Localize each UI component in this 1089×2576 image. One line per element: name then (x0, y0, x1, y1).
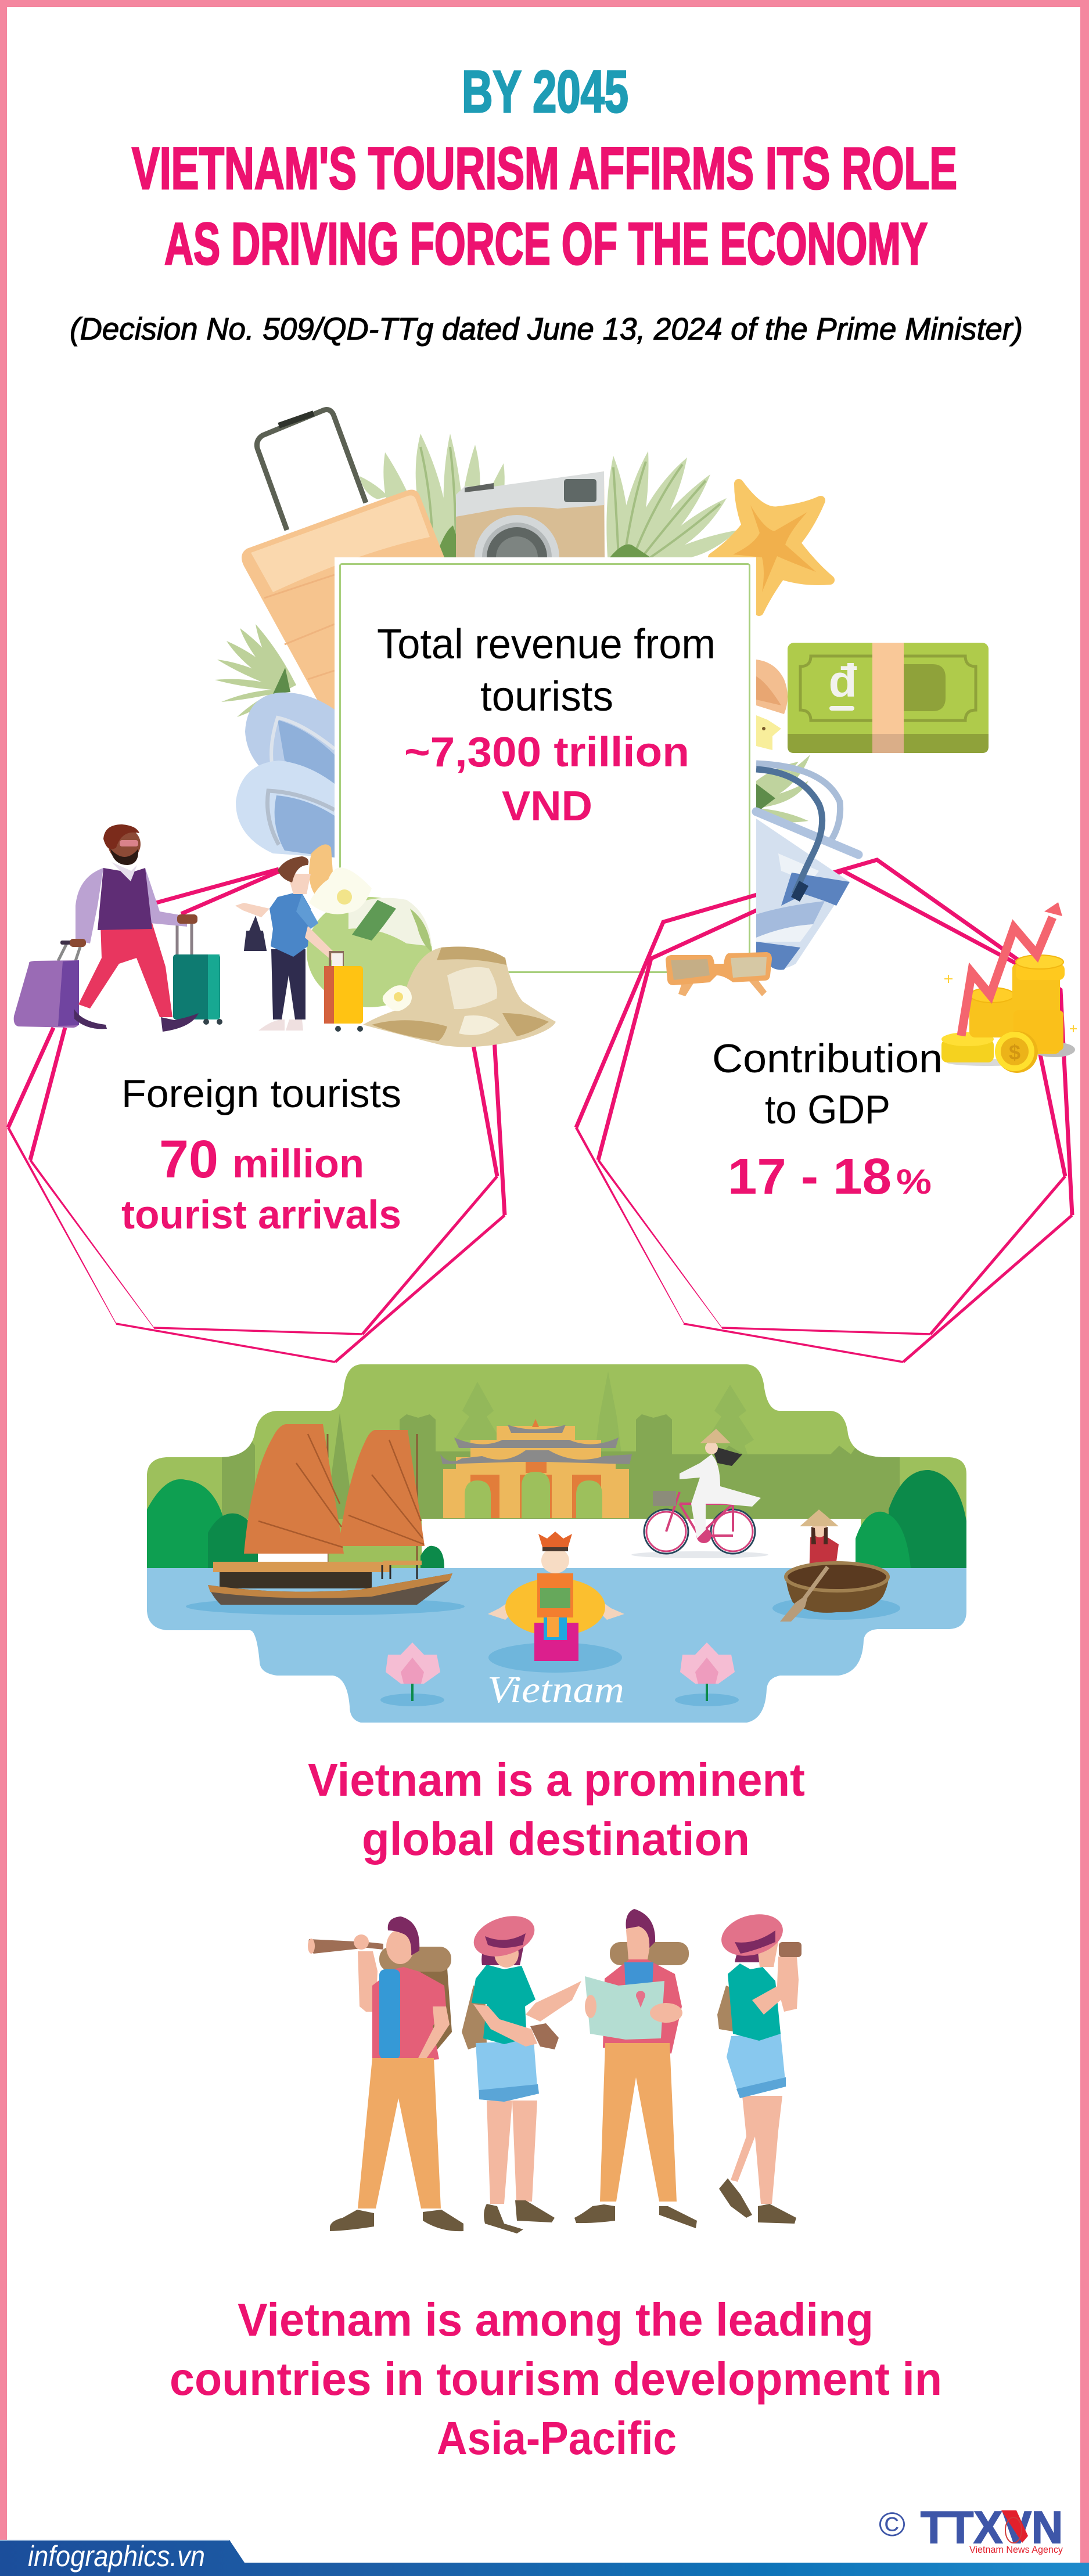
polygon frame: contribution to GDP (575, 860, 1072, 1362)
icon: palm leaves top (360, 434, 738, 557)
icon: rising chart with gold coins: $ (1009, 1040, 1020, 1064)
backpacker with map (574, 1909, 697, 2228)
footer band (0, 2540, 1089, 2576)
heading: leading countries in tourism development: Vietnam is among the leading (238, 2294, 874, 2346)
icon: sunglasses (666, 952, 772, 996)
heading: leading countries in tourism development: Asia-Pacific (437, 2412, 677, 2464)
illustration: coconut and flower (307, 844, 432, 1007)
text: contribution to GDP (712, 1036, 943, 1205)
text: foreign tourists: tourist arrivals (121, 1192, 401, 1237)
text: foreign tourists: million (232, 1141, 364, 1186)
title: BY 2045 (462, 59, 628, 125)
icon: shell and flowers right of box (756, 660, 788, 750)
icon: suitcase with handle (242, 410, 444, 732)
heading: leading countries in tourism development: countries in tourism development in (170, 2353, 942, 2405)
panel: total revenue box (335, 557, 756, 981)
text: total revenue: Total revenue from (377, 621, 716, 668)
cyclist in ao dai (631, 1429, 768, 1558)
illustration: Vietnam scene (139, 1359, 976, 1731)
icon: beach bag (756, 755, 858, 970)
heading: prominent global destination: Vietnam is a prominent (308, 1754, 805, 1806)
backpacker with camera (462, 1909, 581, 2233)
text: total revenue: ~7,300 trillion (404, 729, 689, 776)
coracle boat woman (772, 1509, 900, 1622)
lotus flowers (380, 1642, 739, 1706)
polygon frame: foreign tourists (7, 869, 505, 1362)
illustration: sun hat (363, 946, 556, 1047)
Vietnam script label: Vietnam (487, 1669, 624, 1711)
text: contribution to GDP: % (896, 1162, 932, 1201)
text: total revenue: VND (502, 783, 592, 830)
landscape background (139, 1359, 976, 1731)
icon: left leaves (215, 624, 296, 717)
heading: prominent global destination (308, 1754, 805, 1865)
illustration: four backpackers (308, 1908, 802, 2233)
title (132, 59, 957, 277)
logo: TTXVN copyright: © (879, 2506, 905, 2543)
illustration: traveller woman with suitcase (235, 856, 363, 1032)
imperial gate (440, 1419, 632, 1518)
icon: flip-flops (236, 693, 335, 858)
junk boat (186, 1424, 465, 1615)
text: total revenue (377, 621, 716, 830)
heading: prominent global destination: global destination (362, 1813, 750, 1865)
text: foreign tourists (121, 1072, 401, 1237)
text: foreign tourists: 70 (159, 1130, 218, 1189)
text: contribution to GDP: to GDP (765, 1087, 890, 1132)
icon: starfish (713, 484, 830, 611)
backpacker with binoculars (717, 1908, 802, 2224)
icon: camera (456, 471, 605, 600)
icon: banknote (788, 643, 989, 753)
text: total revenue: tourists (480, 673, 613, 720)
text: contribution to GDP: 17 - 18 (728, 1148, 892, 1205)
footer site label: infographics.vn (28, 2540, 205, 2573)
logo: TTXVN copyright: Vietnam News Agency (969, 2544, 1063, 2555)
illustration: traveller man with suitcases (14, 824, 222, 1032)
heading: leading countries in tourism development (170, 2294, 942, 2464)
backpacker with telescope (308, 1916, 463, 2231)
logo: TTXVN copyright: TTXVN (921, 2502, 1063, 2553)
water puppet (488, 1532, 624, 1673)
subtitle: (Decision No. 509/QD-TTg dated June 13, 2024 of the Prime Minister) (70, 312, 1023, 347)
text: contribution to GDP: Contribution (712, 1036, 943, 1081)
icon: rising chart with gold coins (941, 902, 1077, 1073)
text: foreign tourists: Foreign tourists (121, 1072, 401, 1116)
icon: banknote: đ (829, 655, 857, 707)
